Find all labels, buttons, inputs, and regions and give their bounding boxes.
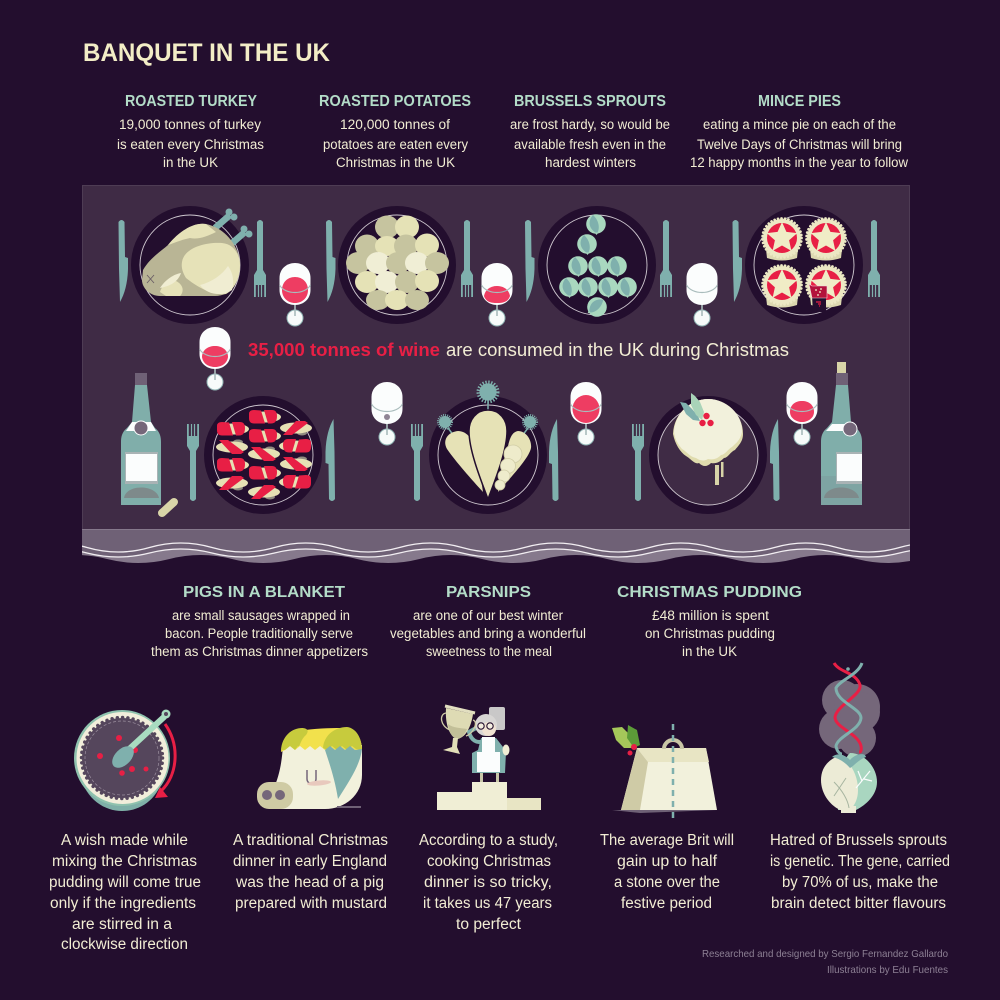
plate: brussels sprouts xyxy=(538,206,656,324)
text: pigs in a blanket: them as Christmas dinner appetizers xyxy=(151,644,368,659)
text: roasted turkey: ROASTED TURKEY xyxy=(125,93,258,110)
text: pig head: dinner in early England xyxy=(233,853,387,870)
text: roasted turkey: 19,000 tonnes of turkey xyxy=(119,117,261,132)
text: sprout gene: by 70% of us, make the xyxy=(782,874,938,891)
text: mince pies: Twelve Days of Christmas will bring xyxy=(697,137,902,152)
text: parsnips: sweetness to the meal xyxy=(426,644,552,659)
text: 47 years: cooking Christmas xyxy=(427,853,551,870)
text: parsnips: vegetables and bring a wonderful xyxy=(390,626,586,641)
wine bottle: right xyxy=(821,362,862,505)
plate: mince pies xyxy=(745,206,863,324)
credits: Researched and designed by Sergio Fernandez Gallardo xyxy=(702,948,948,960)
wine bottle: left xyxy=(121,373,161,505)
text: roasted potatoes: Christmas in the UK xyxy=(336,155,455,170)
text: pigs in a blanket: are small sausages wrapped in xyxy=(172,608,350,623)
text: wish: clockwise direction xyxy=(61,936,188,953)
text: pig head: prepared with mustard xyxy=(235,895,387,912)
plate: parsnips xyxy=(429,382,547,514)
text: brussels sprouts: available fresh even in the xyxy=(514,137,666,152)
text: roasted turkey: in the UK xyxy=(163,155,218,170)
text: 47 years: According to a study, xyxy=(419,832,558,849)
text: mince pies: MINCE PIES xyxy=(758,93,841,110)
text: brussels sprouts: hardest winters xyxy=(545,155,636,170)
cork xyxy=(162,502,174,513)
text: christmas pudding xyxy=(617,584,802,659)
text: roasted potatoes xyxy=(319,93,471,170)
text: parsnips: PARSNIPS xyxy=(446,584,531,601)
text: pigs in a blanket: bacon. People traditionally serve xyxy=(165,626,353,641)
text: wish: pudding will come true xyxy=(49,874,201,891)
text: mince pies: eating a mince pie on each of the xyxy=(703,117,896,132)
credits xyxy=(702,948,948,976)
text: christmas pudding: CHRISTMAS PUDDING xyxy=(617,584,802,601)
text: sprout gene: Hatred of Brussels sprouts xyxy=(770,832,947,849)
text: brussels sprouts: BRUSSELS SPROUTS xyxy=(514,93,666,110)
text: roasted potatoes: ROASTED POTATOES xyxy=(319,93,471,110)
text: christmas pudding: £48 million is spent xyxy=(652,608,769,623)
text: mince pies xyxy=(690,93,908,170)
text: sprout gene: is genetic. The gene, carried xyxy=(770,853,950,870)
text: half a stone: a stone over the xyxy=(614,874,720,891)
text: wish: are stirred in a xyxy=(72,916,172,933)
icon: cook on podium with trophy xyxy=(437,706,541,810)
text: christmas pudding: in the UK xyxy=(682,644,737,659)
text: 47 years: to perfect xyxy=(456,916,522,933)
text: 47 years: dinner is so tricky, xyxy=(424,874,552,891)
text: pig head: A traditional Christmas xyxy=(233,832,388,849)
text: parsnips: are one of our best winter xyxy=(413,608,563,623)
text: sprout gene xyxy=(770,832,950,912)
plate: roasted potatoes xyxy=(338,206,456,324)
cutlery: bottom row xyxy=(187,419,780,501)
text: pigs in a blanket: PIGS IN A BLANKET xyxy=(183,584,346,601)
text: sprout gene: brain detect bitter flavours xyxy=(771,895,946,912)
text: half a stone: gain up to half xyxy=(617,853,718,870)
credits: Illustrations by Edu Fuentes xyxy=(827,964,948,976)
plate: christmas pudding xyxy=(649,393,767,514)
wine glasses xyxy=(200,263,818,445)
plate: pigs in a blanket xyxy=(204,396,322,514)
text: wish: mixing the Christmas xyxy=(52,853,197,870)
text: wish xyxy=(49,832,201,953)
text: brussels sprouts xyxy=(510,93,670,170)
text: roasted potatoes: potatoes are eaten every xyxy=(323,137,468,152)
text: pigs in a blanket xyxy=(151,584,368,659)
text: half a stone: The average Brit will xyxy=(600,832,734,849)
text: mince pies: 12 happy months in the year to follow xyxy=(690,155,908,170)
panel: banquet table xyxy=(82,186,910,530)
text: 47 years xyxy=(419,832,558,933)
icon: weight pudding xyxy=(612,724,717,819)
icon: pig head xyxy=(257,727,362,809)
text: 47 years: it takes us 47 years xyxy=(423,895,552,912)
tablecloth edge xyxy=(82,529,910,563)
text: roasted turkey: is eaten every Christmas xyxy=(117,137,264,152)
wine statement continued: are consumed in the UK during Christmas xyxy=(446,340,789,360)
text: half a stone xyxy=(600,832,734,912)
text: wish: A wish made while xyxy=(61,832,188,849)
text: pig head xyxy=(233,832,388,912)
cutlery: top row xyxy=(118,220,880,302)
text: brussels sprouts: are frost hardy, so would be xyxy=(510,117,670,132)
wine statement: 35,000 tonnes of wine xyxy=(248,340,440,360)
icon: pudding mixing bowl xyxy=(74,710,175,811)
text: half a stone: festive period xyxy=(621,895,712,912)
text: parsnips xyxy=(390,584,586,659)
plate: roasted turkey xyxy=(131,206,252,324)
text: pig head: was the head of a pig xyxy=(235,874,384,891)
icon: dna and brussels sprout xyxy=(819,663,880,813)
text: wish: only if the ingredients xyxy=(50,895,196,912)
text: roasted potatoes: 120,000 tonnes of xyxy=(340,117,450,132)
text: christmas pudding: on Christmas pudding xyxy=(645,626,775,641)
text: roasted turkey xyxy=(117,93,264,170)
title: BANQUET IN THE UK xyxy=(83,39,330,67)
